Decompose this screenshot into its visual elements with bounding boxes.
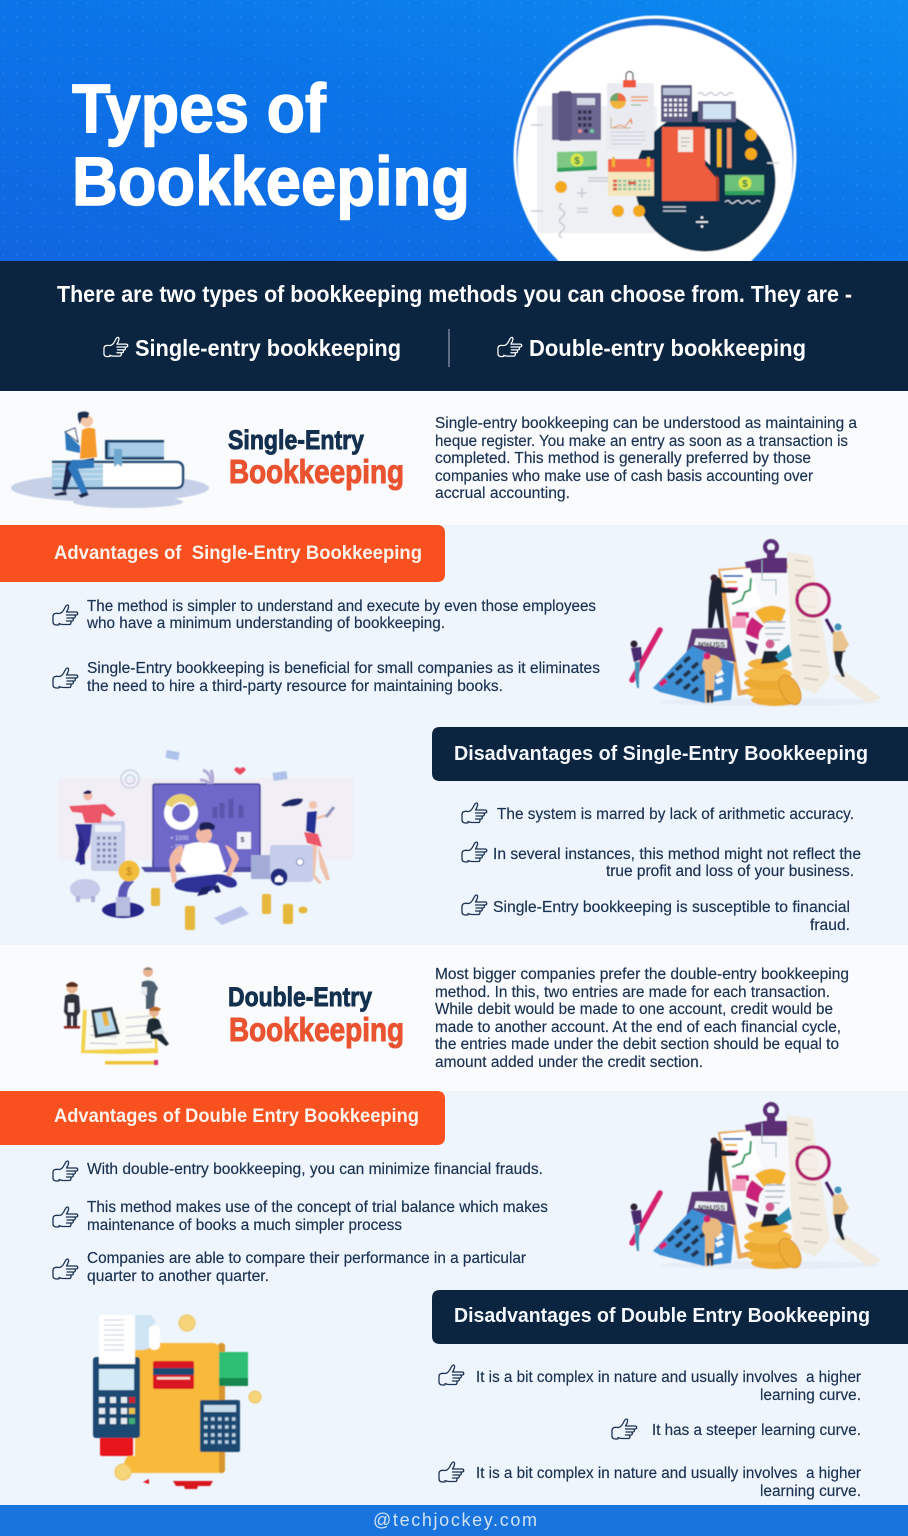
bullet 1 [439,1365,861,1404]
title: Bookkeeping [72,143,470,220]
list: double entry advantages [53,1161,548,1285]
title: Types of [72,70,327,147]
bullet 1: who have a minimum understanding of bookkeeping. [86,615,445,632]
woman with tablet [281,798,334,884]
bullet 2: Single-Entry bookkeeping is beneficial for small companies as it eliminates [87,660,600,677]
heading: double-entry bookkeeping [228,982,404,1048]
banner: disadvantages of double entry: Disadvantages of Double Entry Bookkeeping [454,1304,870,1327]
footer: @techjockey.com [373,1510,537,1530]
bullet 1 [53,598,596,632]
text: double-entry description [435,966,849,1071]
icon: tablet [698,101,736,122]
bullet 2 [53,660,600,695]
laptop: + 1000 [170,836,189,842]
icon: report document [607,72,654,150]
laptop: − 950 [170,845,186,851]
banner: disadvantages of single-entry: Disadvantages of Single-Entry Bookkeeping [454,742,868,765]
icon: banknote left: $ [574,156,580,167]
bullet 2: maintenance of books a much simpler process [87,1217,402,1234]
text: double-entry description: method. In this, two entries are made for each transaction. [435,984,830,1001]
text: single-entry description: Single-entry bookkeeping can be understood as maintaining a [435,415,857,432]
bullet 2: In several instances, this method might not reflect the [493,846,861,863]
bullet 3 [439,1462,861,1500]
bullet 1: With double-entry bookkeeping, you can minimize financial frauds. [87,1161,543,1178]
panel: double-entry intro [0,945,908,1091]
banner: advantages of single-entry: Advantages of Single-Entry Bookkeeping [54,542,422,564]
bullet 2: the need to hire a third-party resource for maintaining books. [87,678,503,695]
item: single-entry bookkeeping: Single-entry bookkeeping [135,335,401,361]
text: double-entry description: amount added under the credit section. [435,1054,703,1071]
bullet 3: It is a bit complex in nature and usually involves a higher [476,1465,861,1482]
heading: double-entry bookkeeping: Double-Entry [228,982,372,1012]
banknotes [219,1352,248,1386]
red shadow marks [143,1479,213,1489]
text: single-entry description: accrual accounting. [435,485,570,502]
credit card [153,1361,194,1389]
text: double-entry description: the entries made under the debit section should be equal to [435,1036,839,1053]
icon: banknote left [557,151,597,172]
bullet 3: Single-Entry bookkeeping is susceptible to financial [493,899,850,916]
bullet 2: This method makes use of the concept of trial balance which makes [87,1199,548,1216]
icon: banknote right: $ [742,179,748,190]
text: double-entry description: Most bigger companies prefer the double-entry bookkeeping [435,966,849,983]
bullet 3: quarter to another quarter. [87,1268,269,1285]
bullet 2 [462,842,861,880]
laptop: $ [240,837,244,844]
heading: single-entry bookkeeping [228,425,404,490]
heading: single-entry bookkeeping: Single-Entry [228,425,364,455]
illustration: clipboard and calculator, repeated [630,1104,882,1271]
math symbols and squiggles [531,125,779,238]
list: single-entry advantages [53,598,600,695]
bullet 3 [462,895,850,934]
panel: single-entry intro [0,391,908,525]
heading: single-entry bookkeeping: Bookkeeping [229,453,404,490]
coins [115,1315,261,1480]
banner: advantages of double entry [0,1091,445,1145]
man with calculator [69,790,125,871]
icon: calendar [608,157,654,196]
illustration: accountants on open ledger [64,967,169,1065]
illustration: clipboard and calculator [630,541,882,708]
text: double-entry description: made to another account. At the end of each financial cycle, [435,1019,841,1036]
hero circle with office illustration [512,14,798,261]
list: single-entry disadvantages [462,803,861,934]
text: single-entry description: completed. This method is generally preferred by those [435,450,811,467]
bullet 1: The method is simpler to understand and execute by even those employees [87,598,596,615]
banner: advantages of double entry: Advantages of Double Entry Bookkeeping [54,1105,419,1127]
bullet 3: Companies are able to compare their performance in a particular [87,1250,526,1267]
banner: disadvantages of single-entry [432,727,908,781]
bullet 2: It has a steeper learning curve. [652,1422,861,1439]
piggy bank [70,879,100,902]
item: double-entry bookkeeping: Double-entry bookkeeping [529,335,806,361]
bullet 1: The system is marred by lack of arithmetic accuracy. [497,806,854,823]
bullet 1: It is a bit complex in nature and usually involves a higher [476,1369,861,1386]
bullet 1: learning curve. [760,1387,861,1404]
background: light blue content area [0,391,908,1505]
list: double entry disadvantages [439,1365,861,1500]
intro heading: There are two types of bookkeeping methods you can choose from. They are - [57,281,852,307]
text: double-entry description: While debit would be made to one account, credit would be [435,1001,833,1018]
receipt tail [135,1315,160,1350]
banner: disadvantages of double entry [432,1290,908,1344]
icon: orange folder [662,127,719,201]
coins [151,888,308,930]
icon: desk phone [552,91,601,141]
intro band [0,261,908,391]
illustration: people around laptop [58,750,353,930]
illustration: man reading on books [11,412,209,508]
text: single-entry description: heque register. You make an entry as soon as a transaction is [435,433,848,450]
bullet 3: fraud. [810,917,850,934]
laptop [141,784,270,872]
cash stack [214,906,249,925]
illustration: folder with payment terminal [93,1315,261,1489]
icon: calculator [661,85,692,122]
hand holding coin from hole [102,860,144,918]
header banner [0,0,908,261]
bullet 2 [53,1199,548,1234]
text: single-entry description [435,415,857,502]
icon: pencils [717,128,732,168]
title [72,70,470,220]
icon: coins [555,129,757,217]
banner: advantages of single-entry [0,525,445,582]
bullet 2: true profit and loss of your business. [606,863,854,880]
seated man [169,822,239,896]
calculator [200,1400,240,1452]
hand holding coin from hole: $ [126,866,132,878]
heading: double-entry bookkeeping: Bookkeeping [229,1011,404,1048]
payment terminal [93,1315,140,1456]
icon: banknote right [725,175,764,195]
bullet 3: learning curve. [760,1483,861,1500]
footer [0,1505,908,1536]
wallet and cash [251,845,313,886]
bullet 3 [53,1250,526,1285]
text: single-entry description: companies who make use of cash basis accounting over [435,468,813,485]
